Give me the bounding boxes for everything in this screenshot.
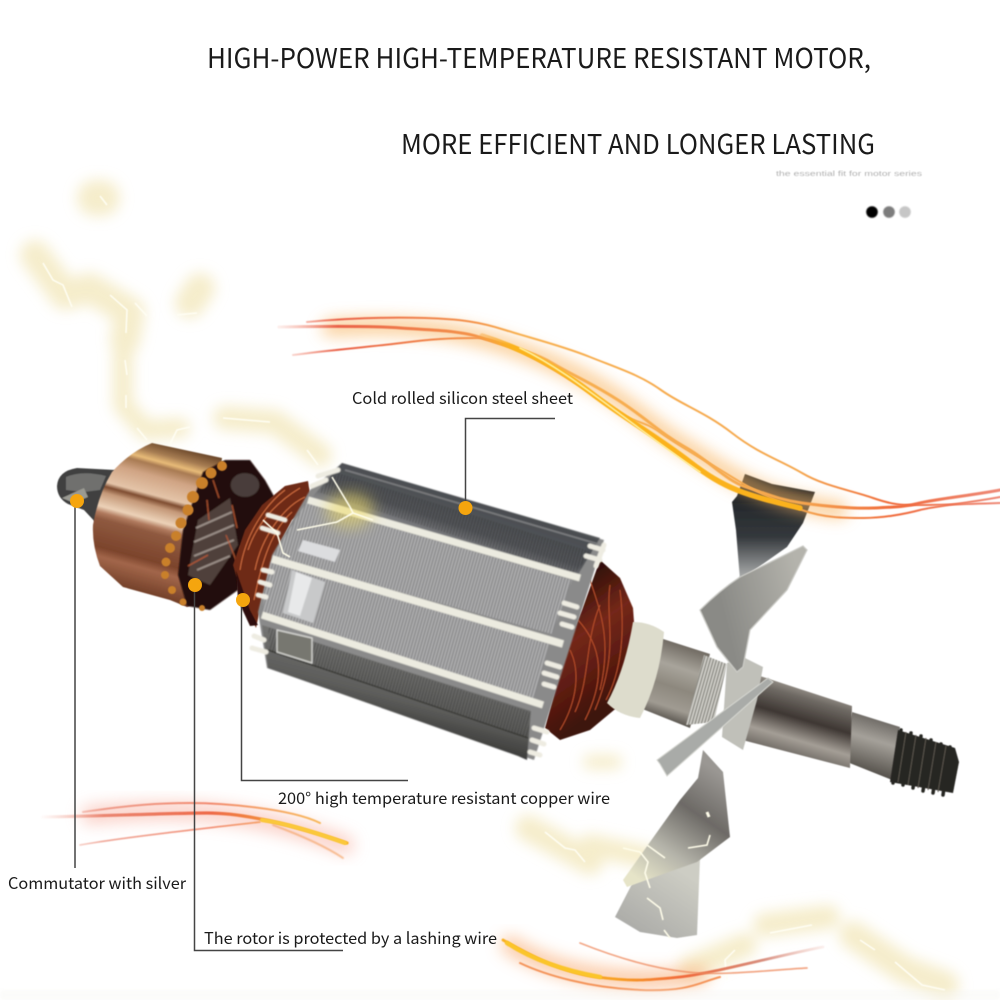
background glow: lightning clouds bbox=[35, 198, 945, 985]
dark bottom lamination bbox=[262, 625, 531, 760]
upper grey lamination bbox=[272, 503, 572, 634]
fan hub bbox=[722, 657, 763, 750]
callout: copper wire bbox=[236, 593, 610, 809]
plastic collar bbox=[607, 622, 664, 718]
copper winding, left bbox=[233, 481, 312, 628]
commutator bbox=[93, 443, 222, 607]
lower grey lamination bbox=[262, 562, 549, 700]
fan blade: cross bbox=[657, 678, 773, 776]
commutator solder ring bbox=[161, 461, 227, 611]
threaded end bbox=[890, 730, 959, 795]
title: MORE EFFICIENT AND LONGER LASTING bbox=[401, 122, 875, 162]
callout: silicon steel: Cold rolled silicon steel sheet bbox=[352, 385, 573, 409]
copper winding, right bbox=[545, 560, 636, 740]
shaft tip bbox=[57, 468, 115, 525]
stator core bbox=[252, 463, 604, 760]
fan blade: top bbox=[732, 474, 815, 580]
knurled section bbox=[686, 655, 727, 725]
faded caption: the essential fit for motor series bbox=[776, 171, 923, 178]
fan blade: upper bbox=[700, 546, 807, 672]
fan blade: lower bbox=[623, 750, 730, 887]
color dots bbox=[866, 206, 911, 218]
flame: top right bbox=[279, 318, 1000, 518]
polished flats bbox=[298, 540, 340, 562]
callout: lashing wire bbox=[188, 578, 497, 950]
shaft, shoulder bbox=[842, 712, 900, 780]
shaft, collar to knurl bbox=[640, 638, 710, 728]
fan blade: lower tip bbox=[615, 858, 700, 938]
callout: commutator bbox=[8, 494, 187, 894]
flame: bottom bbox=[503, 940, 823, 990]
title: HIGH-POWER HIGH-TEMPERATURE RESISTANT MOTOR, bbox=[207, 36, 871, 76]
callout: copper wire: 200° high temperature resistant copper wire bbox=[278, 785, 610, 809]
insulation teeth, right bbox=[530, 545, 604, 755]
lower fade bbox=[0, 990, 1000, 1000]
lightning streaks bbox=[43, 196, 945, 990]
callout: silicon steel bbox=[352, 385, 573, 515]
callout: commutator: Commutator with silver bbox=[8, 870, 187, 894]
dark top lamination bbox=[312, 463, 600, 578]
stator base bbox=[258, 463, 604, 760]
lightning over armature bbox=[263, 477, 710, 938]
callout: lashing wire: The rotor is protected by a lashing wire bbox=[204, 925, 497, 949]
white insulation bars bbox=[262, 500, 580, 705]
insulation teeth, left bbox=[252, 470, 338, 652]
glow on stator bbox=[326, 492, 374, 528]
motor armature bbox=[57, 443, 959, 938]
winding end, commutator side bbox=[178, 460, 275, 610]
shaft, main bbox=[735, 676, 852, 768]
flame: lower left bbox=[43, 803, 347, 858]
title bbox=[207, 36, 875, 162]
